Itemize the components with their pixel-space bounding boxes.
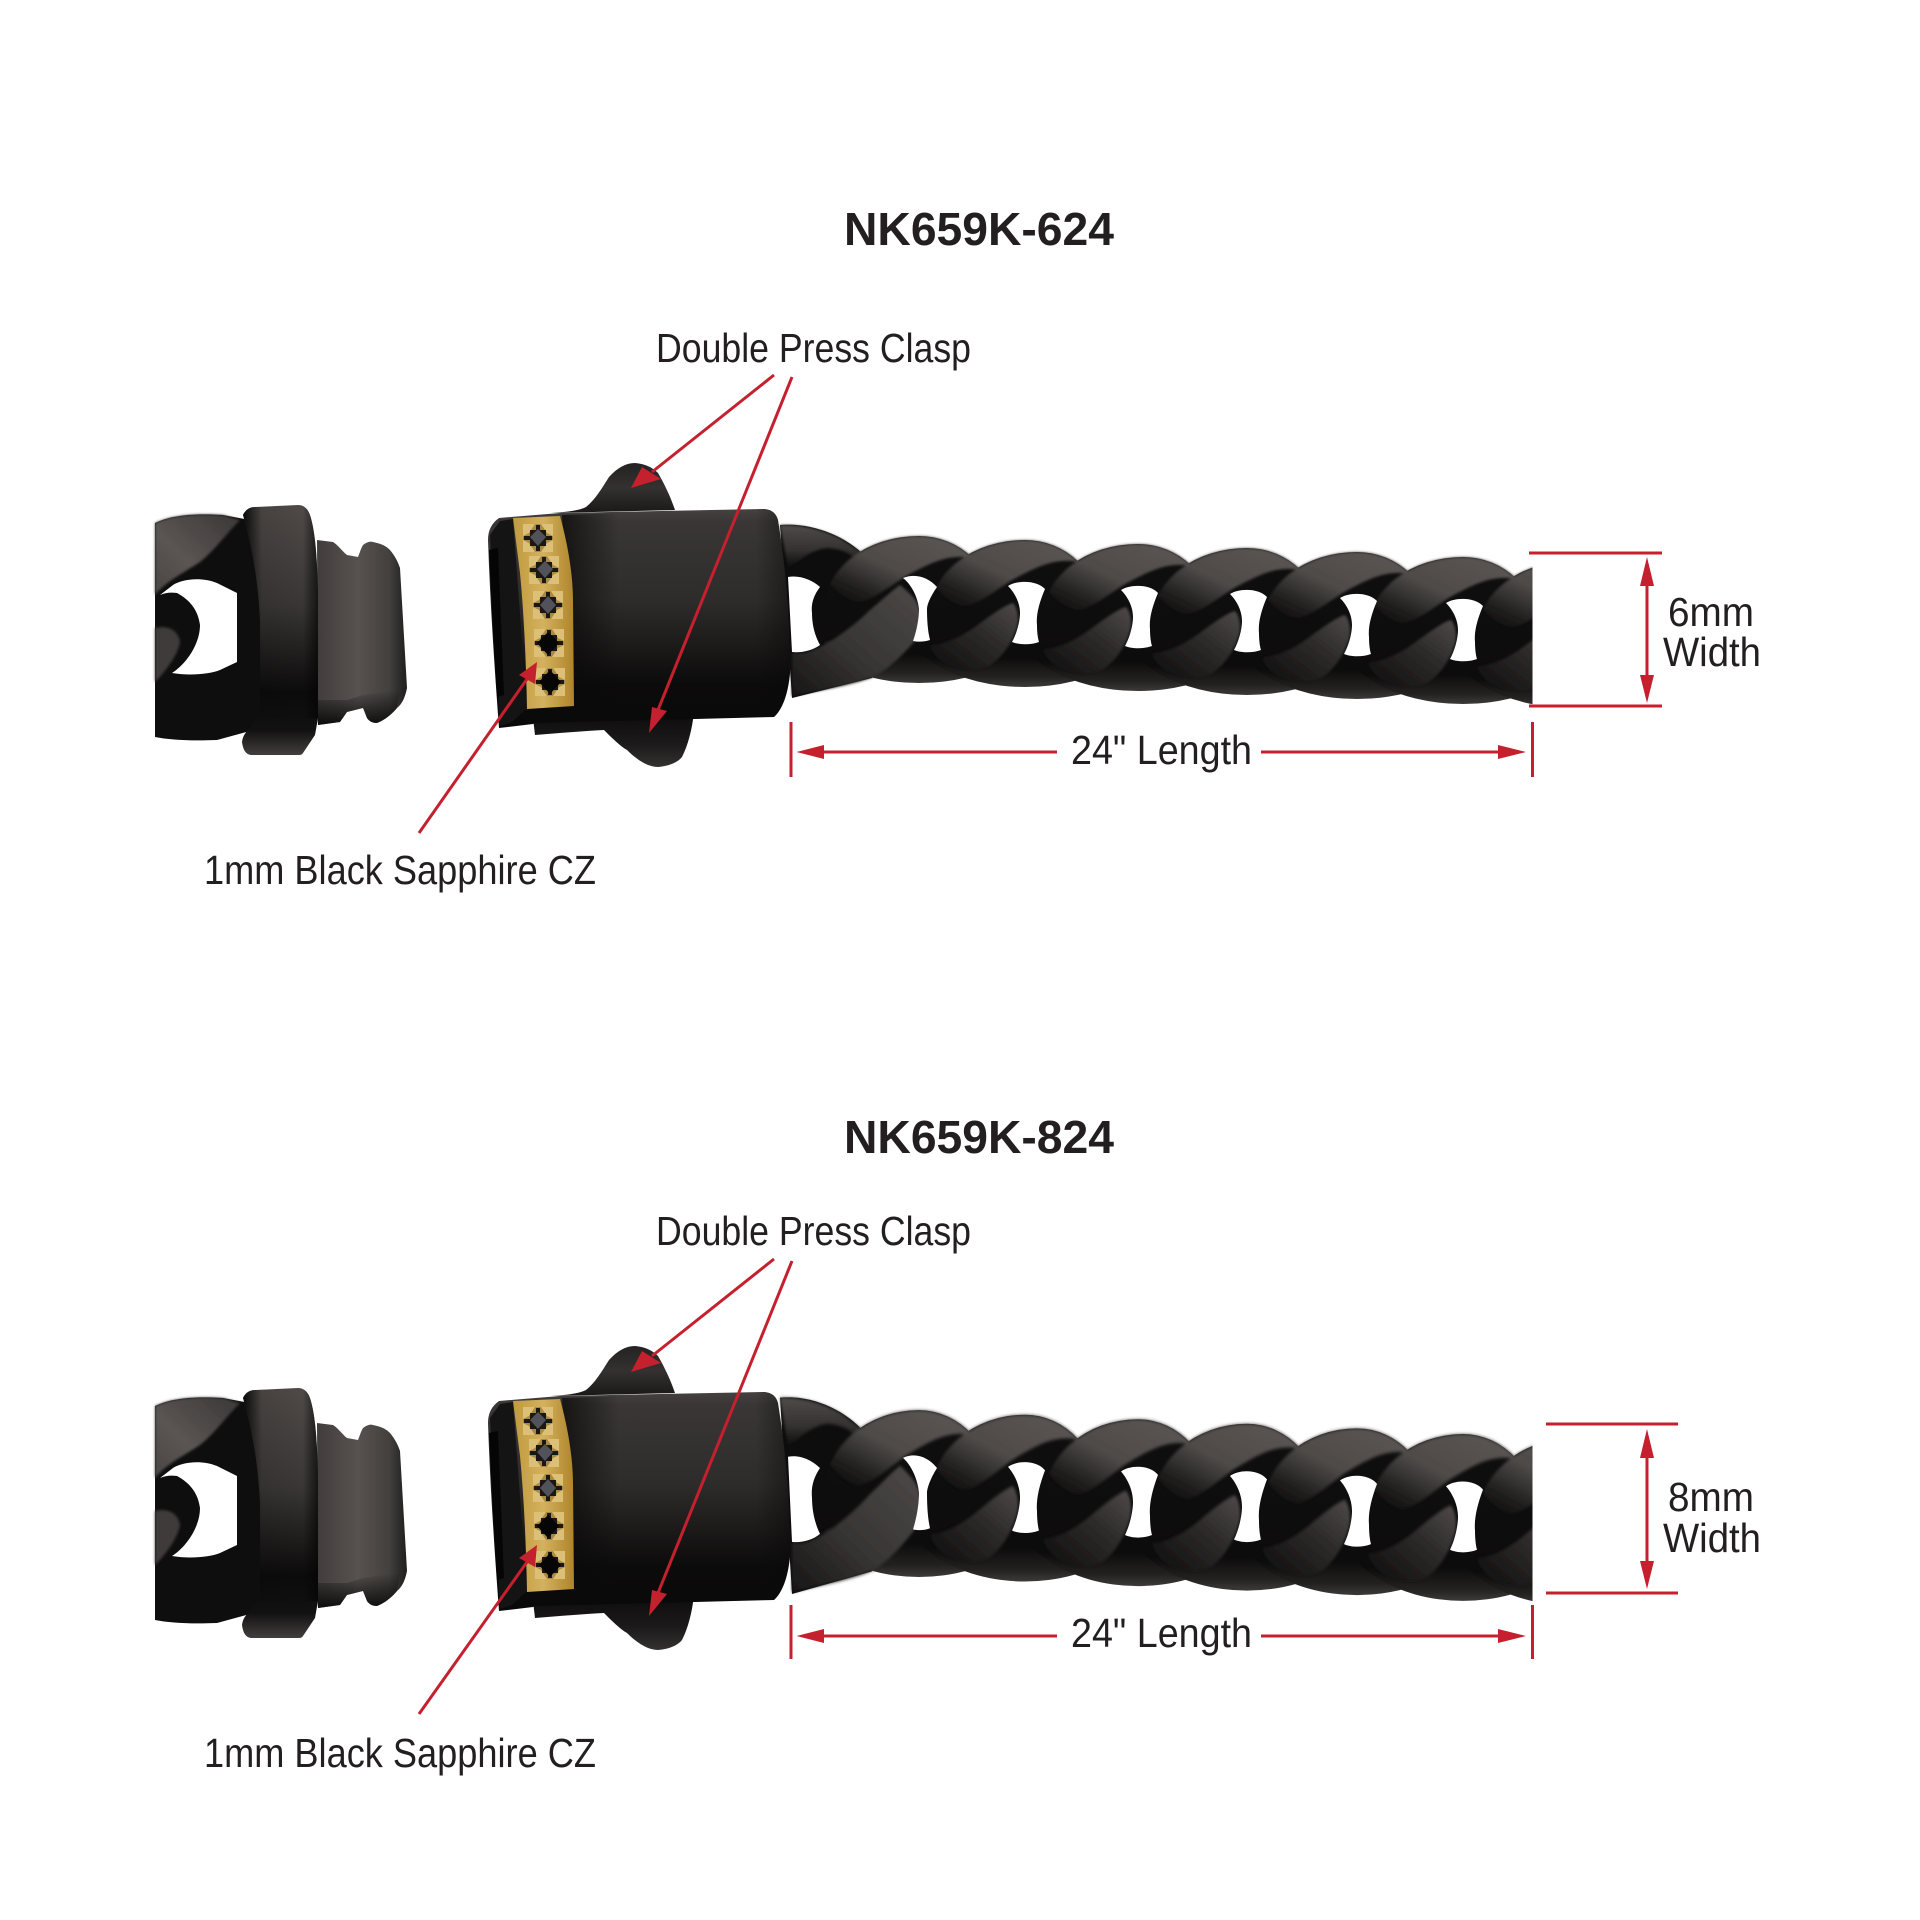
dimension: width: Width <box>1663 1515 1761 1561</box>
arrow: black sapphire <box>419 1545 537 1714</box>
dimension: length <box>791 722 1532 777</box>
arrow: clasp bottom lobe <box>649 377 792 733</box>
clasp: double press body with gold stone strip <box>488 463 790 767</box>
dimension: width: Width <box>1663 629 1761 675</box>
label: black sapphire: 1mm Black Sapphire CZ <box>204 847 596 893</box>
heading: model number: NK659K-624 <box>844 203 1114 255</box>
dimension: length: 24" Length <box>1071 1610 1252 1656</box>
label: black sapphire: 1mm Black Sapphire CZ <box>204 1730 596 1776</box>
arrow: clasp bottom lobe <box>649 1261 792 1616</box>
clasp: double press body with gold stone strip <box>488 1346 790 1650</box>
chain links <box>780 1397 1697 1605</box>
dimension: width: 6mm <box>1668 589 1754 635</box>
arrow: clasp top lobe <box>631 1259 774 1372</box>
arrow: black sapphire <box>419 662 537 833</box>
dimension: length <box>791 1605 1532 1659</box>
panel: necklace NK659K-624 <box>155 203 1761 893</box>
panel: necklace NK659K-824 <box>155 1111 1761 1776</box>
clasp: left tongue end <box>155 1388 407 1638</box>
dimension: width <box>1529 553 1761 706</box>
dimension: width <box>1546 1424 1761 1593</box>
clasp: left tongue end <box>155 505 407 755</box>
label: double press clasp: Double Press Clasp <box>656 1208 971 1254</box>
chain links <box>780 525 1697 708</box>
arrow: clasp top lobe <box>631 375 774 488</box>
dimension: length: 24" Length <box>1071 727 1252 773</box>
dimension: width: 8mm <box>1668 1474 1754 1520</box>
heading: model number: NK659K-824 <box>844 1111 1114 1163</box>
label: double press clasp: Double Press Clasp <box>656 325 971 371</box>
